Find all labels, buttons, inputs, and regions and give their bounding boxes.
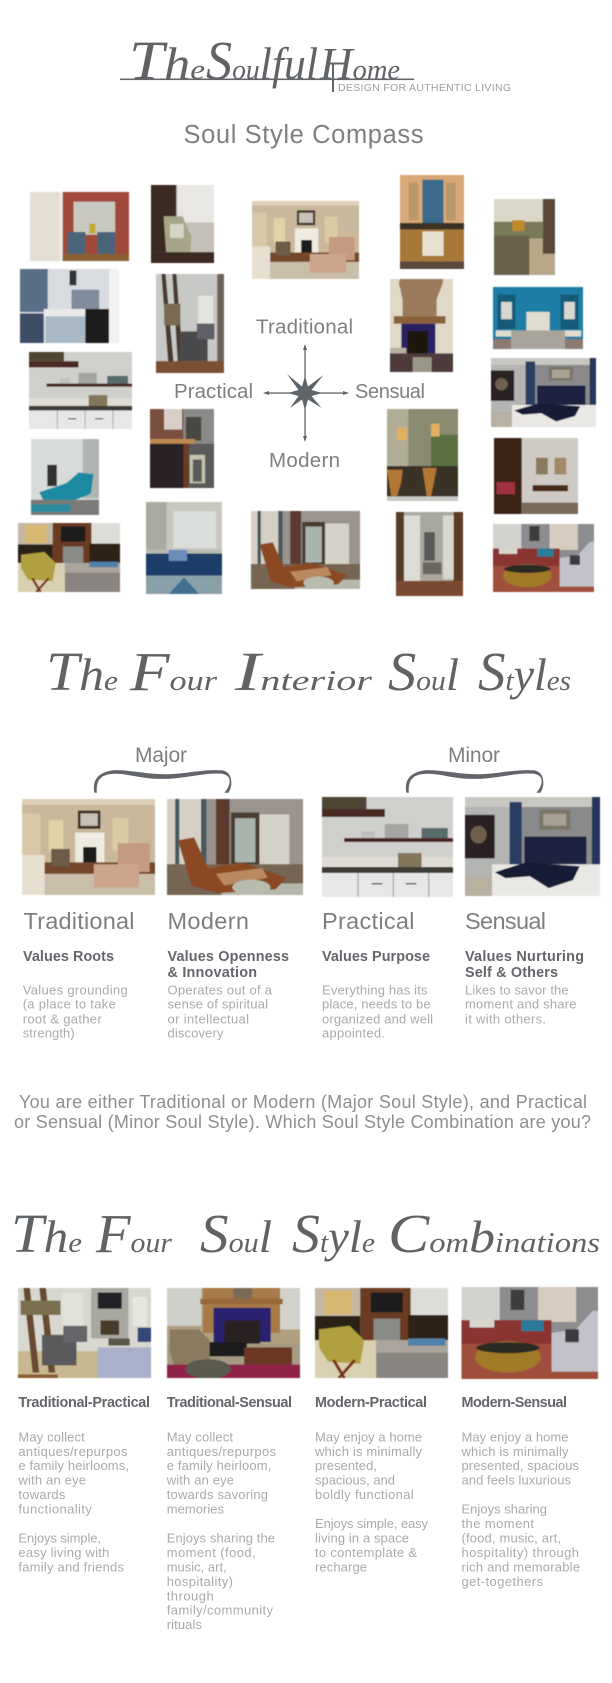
column: Traditional-Practical: functionality: [18, 1502, 92, 1517]
column: Modern-Sensual: May enjoy a home: [462, 1429, 568, 1444]
column: Practical: Values Purpose: [322, 949, 430, 965]
text block: which combination question: or Sensual (Minor Soul Style). Which Soul Style Combination are you?: [14, 1112, 591, 1132]
column: Modern-Practical: spacious, and: [315, 1473, 395, 1488]
four style photos: [22, 797, 600, 897]
photo: white shelves and counter: [29, 352, 132, 429]
column: Traditional-Sensual: [166, 1395, 292, 1632]
label: Major with bracket: [95, 744, 231, 792]
column: Modern: sense of spiritual: [168, 997, 268, 1012]
compass labels: [174, 316, 425, 472]
column: Traditional-Practical: Traditional-Practical: [18, 1395, 150, 1411]
column: Sensual: Likes to savor the: [465, 982, 569, 997]
photo: brick bar with stool: [149, 408, 215, 489]
photo: Traditional-Sensual: [166, 1287, 301, 1379]
photo: olive sofa with orange pillow: [493, 198, 556, 276]
heading: The Four Soul Style Combinations: Combinations: [388, 1203, 600, 1264]
column: Traditional-Sensual: with an eye: [166, 1473, 234, 1488]
heading: The Four Soul Style Combinations: The: [11, 1203, 82, 1264]
column: Modern-Sensual: and feels luxurious: [462, 1473, 572, 1488]
photo: dark wood bench and marble wall: [493, 437, 579, 515]
column: Modern-Practical: Modern-Practical: [315, 1395, 427, 1411]
column: Modern-Practical: [314, 1395, 428, 1574]
photo: Modern: [167, 799, 303, 895]
column: Sensual: moment and share: [465, 997, 576, 1012]
column: Traditional-Sensual: memories: [167, 1502, 224, 1517]
photo: Modern-Sensual: [462, 1287, 598, 1379]
column: Sensual: Values Nurturing: [465, 949, 584, 965]
column: Traditional-Practical: [17, 1395, 150, 1574]
column: Modern-Sensual: Modern-Sensual: [462, 1395, 567, 1411]
column: Traditional: [23, 908, 135, 1041]
heading: The Four Soul Style Combinations: Style: [292, 1203, 375, 1264]
column: Traditional-Practical: e family heirlooms,: [18, 1458, 129, 1473]
column: Traditional-Sensual: moment (food,: [167, 1545, 256, 1560]
column: Traditional-Practical: Enjoys simple,: [18, 1530, 101, 1545]
label: Major with bracket: Major: [135, 744, 187, 767]
column: Traditional-Sensual: May collect: [167, 1429, 233, 1444]
heading: The Four Interior Soul Styles: Soul: [388, 641, 459, 702]
photo: patterned armchair by window: [150, 184, 215, 264]
label: Modern: Modern: [269, 449, 340, 472]
logo: The Soulful Home: The: [129, 30, 205, 91]
photo: teal womb chair: [30, 438, 100, 516]
label: Minor with bracket: [407, 744, 543, 792]
column: Practical: Everything has its: [322, 982, 428, 997]
heading: The Four Soul Style Combinations: Soul: [200, 1203, 272, 1264]
column: Modern-Sensual: which is minimally: [460, 1444, 569, 1459]
column: Modern-Practical: May enjoy a home: [315, 1429, 422, 1444]
column: Modern-Sensual: the moment: [462, 1516, 534, 1531]
column: Modern-Sensual: [460, 1395, 580, 1589]
column: Traditional-Sensual: Enjoys sharing the: [167, 1530, 275, 1545]
column: Modern-Sensual: rich and memorable: [462, 1559, 580, 1574]
column: Traditional-Sensual: family/community: [167, 1603, 274, 1618]
heading: Soul Style Compass: Soul Style Compass: [184, 121, 424, 149]
column: Modern: Operates out of a: [168, 982, 273, 997]
column: Traditional-Sensual: Traditional-Sensual: [167, 1395, 292, 1411]
photo: peach wall with blue panel: [399, 174, 465, 270]
column: Traditional-Practical: easy living with: [18, 1545, 109, 1560]
heading: The Four Soul Style Combinations: [11, 1203, 600, 1264]
label: Minor with bracket: Minor: [448, 744, 500, 767]
heading: The Four Soul Style Combinations: Four: [95, 1203, 173, 1264]
photo: red sofa and gold table: [493, 524, 594, 592]
column: Traditional-Practical: family and friends: [18, 1559, 124, 1574]
column: Traditional-Practical: towards: [18, 1487, 66, 1502]
column: Modern-Practical: to contemplate &: [315, 1545, 417, 1560]
column: Traditional-Sensual: through: [167, 1588, 214, 1603]
column: Sensual: it with others.: [465, 1011, 546, 1026]
column: Practical: Practical: [322, 908, 414, 934]
column: Modern-Sensual: get-togethers: [462, 1574, 544, 1589]
photo: red alcove with blue chairs: [30, 191, 130, 262]
photo: Traditional: [22, 799, 155, 895]
column: Traditional-Sensual: towards savoring: [167, 1487, 268, 1502]
column: Modern-Sensual: Enjoys sharing: [462, 1502, 547, 1517]
column: Modern: & Innovation: [168, 965, 257, 981]
column: Traditional-Practical: with an eye: [17, 1473, 86, 1488]
column: Traditional-Practical: antiques/repurpos: [18, 1444, 128, 1459]
column: Practical: [322, 908, 433, 1041]
column: Modern-Practical: living in a space: [315, 1530, 409, 1545]
heading: The Four Interior Soul Styles: [46, 641, 571, 702]
logo: The Soulful Home: Soulful: [206, 30, 318, 91]
column: Traditional: Values Roots: [23, 949, 114, 965]
logo: The Soulful Home: [120, 30, 511, 94]
label: Traditional: Traditional: [256, 316, 353, 338]
photo: navy bedroom: [491, 358, 596, 427]
heading: The Four Interior Soul Styles: Four: [129, 641, 218, 702]
column: Modern: discovery: [168, 1026, 224, 1041]
icon: compass star: [263, 344, 349, 442]
column: Modern: or intellectual: [168, 1011, 249, 1026]
photo: pendant lights and dining chairs: [386, 408, 459, 502]
column: Traditional: strength): [23, 1026, 75, 1041]
column: Modern: Modern: [168, 908, 249, 934]
column: Traditional: root & gather: [23, 1011, 102, 1026]
logo: The Soulful Home: DESIGN FOR AUTHENTIC LIVING: [338, 82, 511, 94]
photo: Sensual: [465, 797, 600, 896]
text block: which combination question: [14, 1092, 591, 1132]
column: Traditional-Sensual: rituals: [167, 1617, 202, 1632]
text block: which combination question: You are either Traditional or Modern (Major Soul Style), and Practical: [19, 1092, 587, 1112]
logo: The Soulful Home: Home: [319, 38, 400, 89]
photo: traditional living room: [252, 201, 359, 279]
column: Traditional-Sensual: antiques/repurpos: [167, 1444, 276, 1459]
column: Modern-Practical: boldly functional: [315, 1487, 414, 1502]
photo: leather chaise and sliding door: [251, 511, 360, 589]
column: Practical: appointed.: [322, 1026, 385, 1041]
photo: ladder and grey armchair: [155, 273, 225, 374]
photo: white curtains and doorway: [395, 511, 464, 597]
column: Modern-Practical: recharge: [315, 1559, 367, 1574]
label: Sensual: Sensual: [355, 381, 425, 403]
column: Sensual: Self & Others: [465, 965, 558, 981]
column: Practical: place, needs to be: [322, 997, 431, 1012]
column: Traditional: Traditional: [24, 908, 134, 934]
photo: Traditional-Practical: [17, 1287, 152, 1379]
column: Practical: organized and well: [322, 1011, 433, 1026]
column: Traditional-Sensual: hospitality): [167, 1574, 233, 1589]
heading: The Four Interior Soul Styles: Interior: [234, 641, 373, 702]
column: Modern: Values Openness: [168, 949, 289, 965]
photo: yellow chair by fireplace: [18, 523, 120, 592]
column: Modern-Sensual: (food, music, art,: [462, 1530, 561, 1545]
photo: Practical: [322, 797, 453, 897]
column: Modern-Practical: which is minimally: [314, 1444, 422, 1459]
column: Traditional: (a place to take: [23, 997, 116, 1012]
column: Modern-Practical: Enjoys simple, easy: [315, 1516, 428, 1531]
photo: blue sectional sofa: [145, 502, 223, 595]
four combination photos: [18, 1287, 598, 1379]
label: Practical: Practical: [174, 380, 253, 403]
column: Modern-Sensual: presented, spacious: [462, 1458, 580, 1473]
column: Traditional-Sensual: music, art,: [167, 1559, 227, 1574]
photo: Modern-Practical: [315, 1288, 448, 1378]
column: Sensual: [465, 908, 584, 1026]
column: Traditional: Values grounding: [23, 982, 128, 997]
column: Sensual: Sensual: [465, 908, 546, 934]
compass photo collage: [18, 175, 596, 596]
photo: wood hood fireplace with blue tile: [389, 278, 454, 373]
column: Modern-Sensual: hospitality) through: [462, 1545, 579, 1560]
column: Traditional-Sensual: e family heirloom,: [167, 1458, 271, 1473]
column: Modern: [168, 908, 289, 1041]
column: Modern-Practical: presented,: [315, 1458, 377, 1473]
column: Traditional-Practical: May collect: [18, 1429, 85, 1444]
heading: The Four Interior Soul Styles: The: [46, 641, 118, 702]
photo: blue wall bedroom: [492, 286, 584, 350]
photo: blue kitchen with island: [19, 268, 119, 344]
heading: The Four Interior Soul Styles: Styles: [478, 641, 571, 702]
